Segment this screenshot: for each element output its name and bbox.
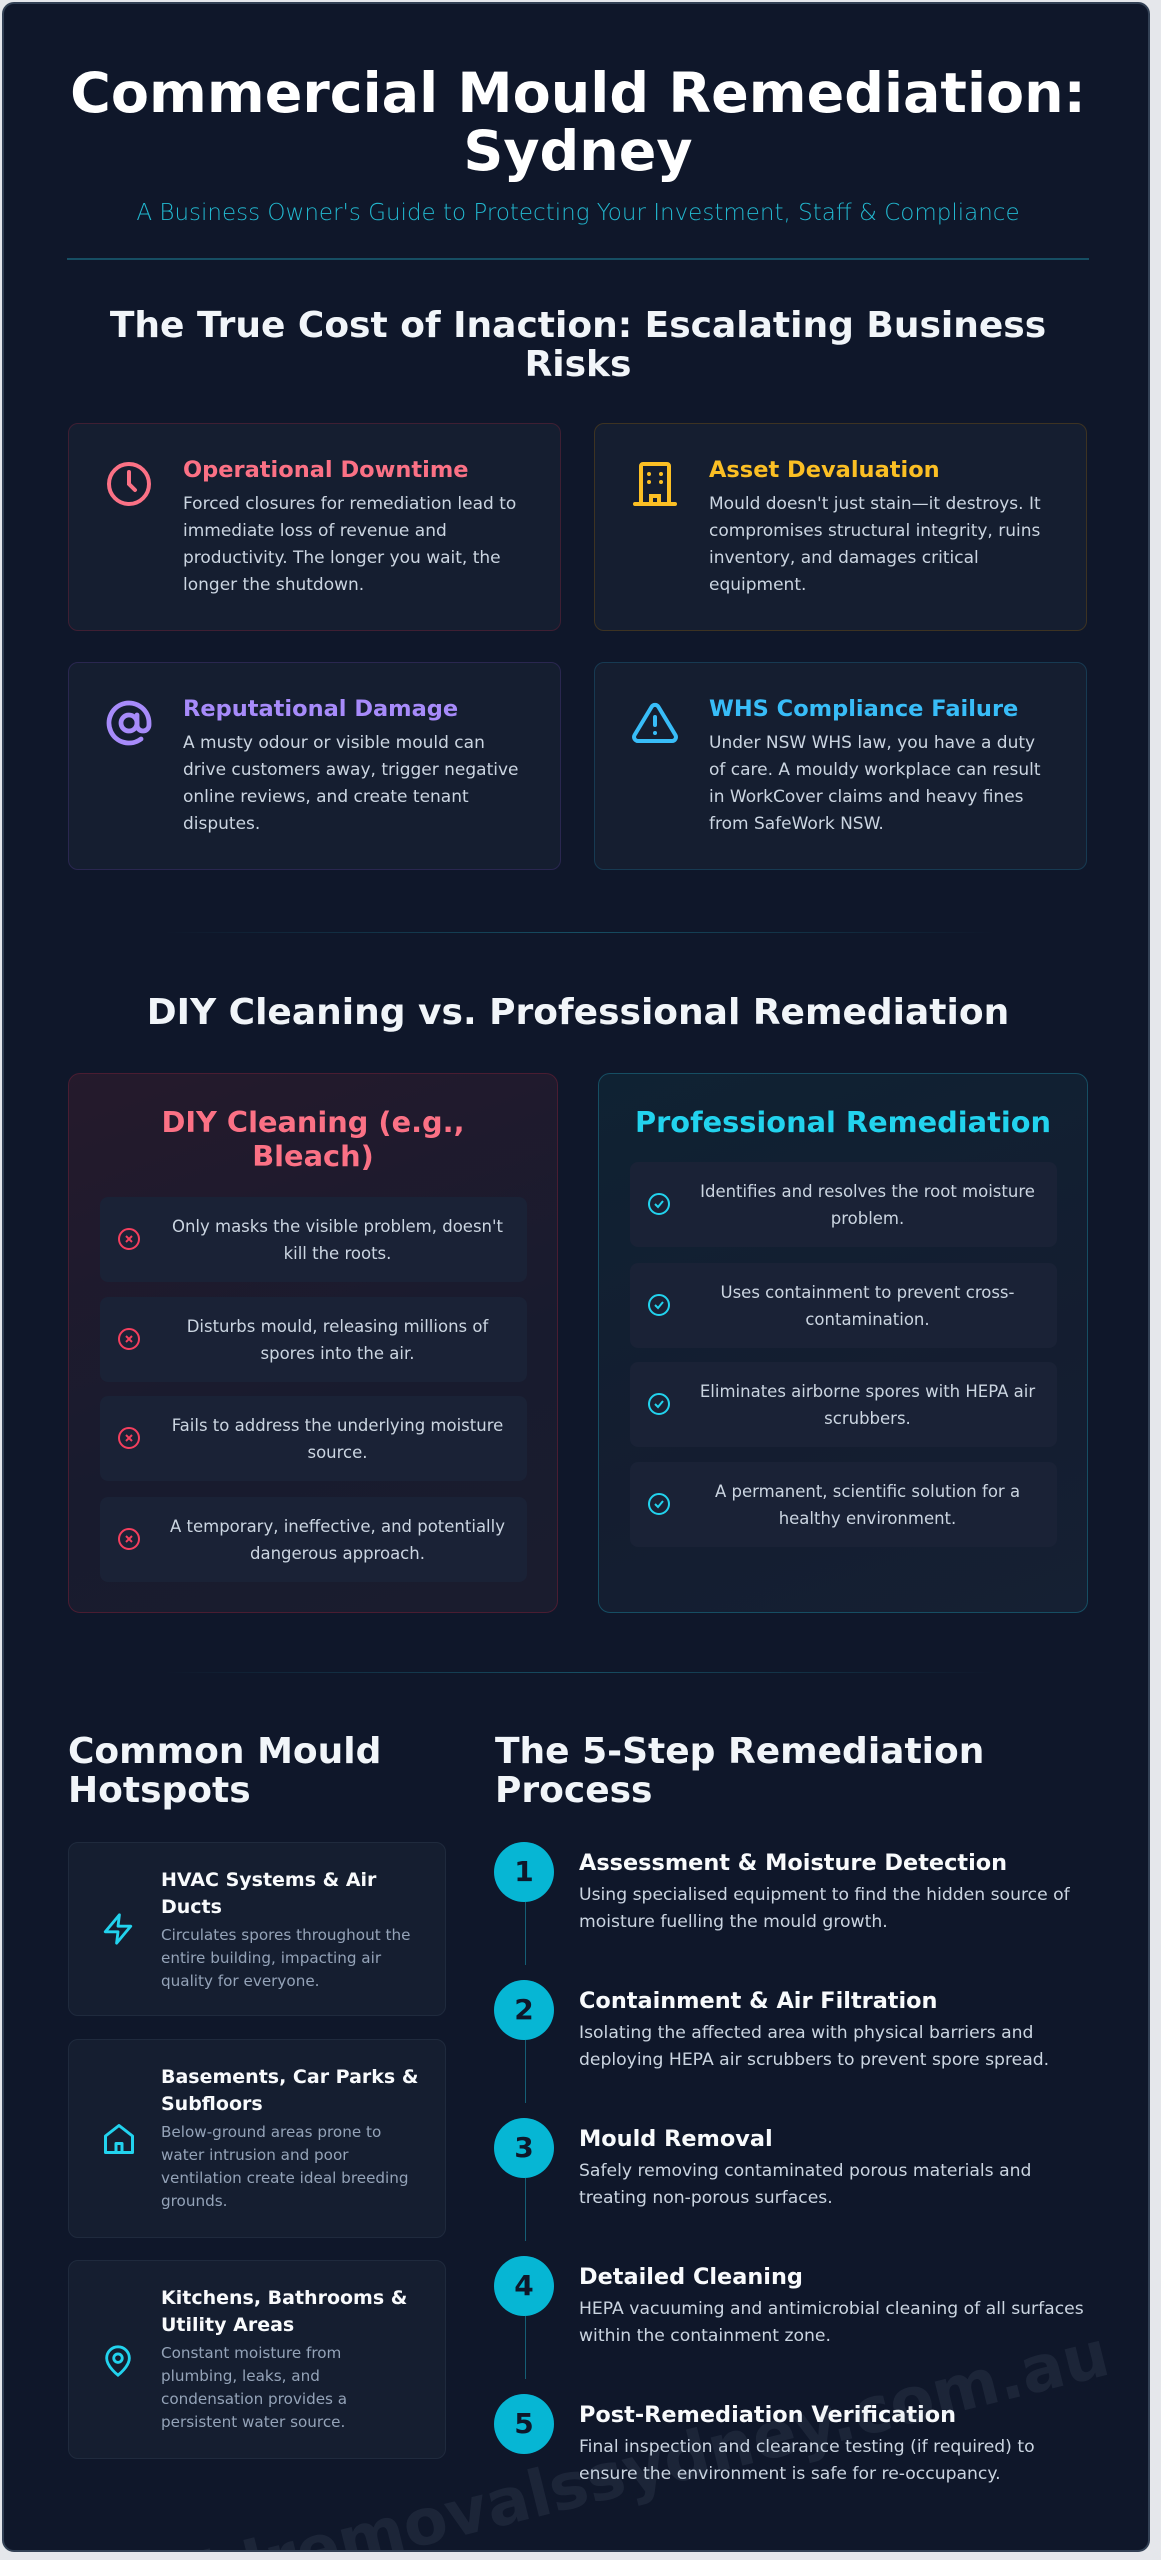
heading: true cost: The True Cost of Inaction: Escalating Business [110, 305, 1046, 346]
heading: true cost [110, 305, 1046, 385]
icon: warning [632, 702, 678, 743]
item: contamination. [805, 1310, 930, 1328]
card text: online reviews, and create tenant [183, 787, 469, 807]
item [630, 1263, 1057, 1348]
card text: equipment. [709, 575, 806, 595]
hotspot: basements [68, 2039, 446, 2238]
title [70, 61, 1086, 184]
heading: 5-step: The 5-Step Remediation [495, 1731, 984, 1772]
step 4: within the containment zone. [579, 2326, 831, 2346]
hotspot: kitchens: Constant moisture from [161, 2344, 341, 2362]
item: Uses containment to prevent cross- [720, 1282, 1014, 1302]
step 3: Mould Removal [579, 2126, 773, 2152]
icon: building [633, 462, 677, 506]
icon: house [104, 2124, 134, 2154]
card text [709, 494, 1041, 595]
card text: of care. A mouldy workplace can result [709, 760, 1040, 780]
card text: compromises structural integrity, ruins [709, 521, 1040, 541]
hotspot: basements: Below-ground areas prone to [161, 2123, 381, 2141]
hotspot: basements: Subfloors [161, 2093, 263, 2115]
hotspot: hvac: HVAC Systems & Air [161, 1869, 376, 1891]
item: Eliminates airborne spores with HEPA air [700, 1382, 1035, 1400]
hotspot: basements: grounds. [161, 2192, 227, 2210]
step 5: ensure the environment is safe for re-occupancy. [579, 2464, 1001, 2484]
heading: hotspots: Hotspots [68, 1770, 251, 1811]
step 2: deploying HEPA air scrubbers to prevent spore spread. [579, 2050, 1049, 2070]
icon: at [106, 700, 152, 746]
card text: Forced closures for remediation lead to [183, 494, 516, 514]
heading: 5-step: Process [495, 1770, 652, 1811]
step 2: Containment & Air Filtration [579, 1988, 938, 2014]
panel title: DIY Cleaning (e.g., [161, 1105, 465, 1139]
card text: productivity. The longer you wait, the [183, 548, 501, 568]
card title: WHS Compliance Failure [709, 696, 1018, 722]
step 5 [494, 2394, 1035, 2484]
hotspot: hvac: entire building, impacting air [161, 1949, 381, 1967]
card text: drive customers away, trigger negative [183, 760, 519, 780]
item: A temporary, ineffective, and potentially [170, 1516, 505, 1536]
heading: true cost: Risks [525, 344, 631, 385]
step 2: 2 [514, 1993, 534, 2026]
panel: professional [598, 1073, 1088, 1613]
card text [183, 733, 519, 834]
item: scrubbers. [824, 1408, 911, 1428]
card title: Operational Downtime [183, 457, 469, 483]
hotspot: basements: Basements, Car Parks & [161, 2066, 418, 2088]
item: problem. [831, 1208, 904, 1228]
step 3: 3 [514, 2131, 534, 2164]
item: Fails to address the underlying moisture [172, 1416, 503, 1434]
item [100, 1497, 527, 1582]
item: dangerous approach. [250, 1544, 425, 1562]
hotspot: basements: water intrusion and poor [161, 2146, 349, 2164]
item: Disturbs mould, releasing millions of [187, 1316, 488, 1336]
step 2: Isolating the affected area with physical barriers and [579, 2023, 1033, 2043]
item [100, 1396, 527, 1481]
card: operational downtime [68, 423, 561, 631]
icon: clock [107, 462, 151, 506]
step 4: Detailed Cleaning [579, 2264, 803, 2290]
hotspot: basements: ventilation create ideal breeding [161, 2169, 409, 2187]
card: whs compliance [594, 662, 1087, 870]
step 1: Using specialised equipment to find the hidden source of [579, 1885, 1070, 1905]
hotspot: hvac: Circulates spores throughout the [161, 1926, 410, 1944]
card text: disputes. [183, 814, 260, 834]
panel: diy [68, 1073, 558, 1613]
hotspot: kitchens: plumbing, leaks, and [161, 2367, 320, 2385]
hotspot: hvac [68, 1842, 446, 2016]
step 1: 1 [514, 1855, 534, 1888]
card text: inventory, and damages critical [709, 548, 979, 568]
step 4: 4 [514, 2269, 534, 2302]
heading: hotspots: Common Mould [68, 1731, 381, 1772]
hotspot: kitchens [68, 2260, 446, 2459]
item [630, 1362, 1057, 1447]
card text: A musty odour or visible mould can [183, 733, 485, 753]
card text: in WorkCover claims and heavy fines [709, 787, 1024, 807]
step 5: 5 [514, 2407, 534, 2440]
card text: Under NSW WHS law, you have a duty [709, 733, 1035, 753]
step 4: HEPA vacuuming and antimicrobial cleaning of all surfaces [579, 2299, 1084, 2319]
panel title: Bleach) [252, 1139, 374, 1173]
card: asset devaluation [594, 423, 1087, 631]
item: source. [307, 1442, 368, 1462]
icon: bolt [104, 1913, 132, 1945]
card title: Reputational Damage [183, 696, 458, 722]
step 3: treating non-porous surfaces. [579, 2188, 833, 2208]
item: healthy environment. [779, 1508, 956, 1528]
step 1 [494, 1842, 1070, 1932]
hotspot: kitchens: condensation provides a [161, 2390, 347, 2408]
panel title: Professional Remediation [635, 1105, 1051, 1139]
card text [709, 733, 1040, 834]
panel title [161, 1105, 465, 1173]
heading: diy vs pro: DIY Cleaning vs. Professional Remediation [147, 992, 1009, 1033]
hotspot: hvac: Ducts [161, 1896, 222, 1918]
card text: longer the shutdown. [183, 575, 364, 595]
step 5: Post-Remediation Verification [579, 2402, 956, 2428]
icon: map pin [105, 2345, 131, 2377]
item [100, 1297, 527, 1382]
hotspot: kitchens: Kitchens, Bathrooms & [161, 2287, 407, 2309]
card title: Asset Devaluation [709, 457, 940, 483]
step 1: moisture fuelling the mould growth. [579, 1912, 888, 1932]
card text: Mould doesn't just stain—it destroys. It [709, 494, 1041, 514]
step 3 [494, 2118, 1031, 2208]
item: kill the roots. [284, 1244, 391, 1262]
item [100, 1197, 527, 1282]
item: spores into the air. [260, 1344, 414, 1362]
card text [183, 494, 516, 595]
item: A permanent, scientific solution for a [715, 1482, 1020, 1500]
item: Only masks the visible problem, doesn't [172, 1216, 503, 1236]
step 3: Safely removing contaminated porous materials and [579, 2161, 1031, 2181]
step 5: Final inspection and clearance testing (if required) to [579, 2437, 1035, 2457]
hotspot: kitchens: Utility Areas [161, 2314, 294, 2336]
item [630, 1462, 1057, 1547]
heading: 5-step [495, 1731, 984, 1811]
subtitle: A Business Owner's Guide to Protecting Your Investment, Staff & Compliance [136, 200, 1020, 226]
item [630, 1162, 1057, 1247]
step 4 [494, 2256, 1084, 2346]
item: Identifies and resolves the root moisture [700, 1182, 1035, 1200]
step 1: Assessment & Moisture Detection [579, 1850, 1007, 1876]
title: Commercial Mould Remediation: [70, 61, 1086, 126]
hotspot: kitchens: persistent water source. [161, 2413, 345, 2431]
hotspot: hvac: quality for everyone. [161, 1972, 320, 1990]
heading: hotspots [68, 1731, 381, 1811]
card: reputational damage [68, 662, 561, 870]
title: Sydney [463, 119, 693, 184]
card text: from SafeWork NSW. [709, 814, 884, 834]
card text: immediate loss of revenue and [183, 521, 447, 541]
step 2 [494, 1980, 1049, 2070]
